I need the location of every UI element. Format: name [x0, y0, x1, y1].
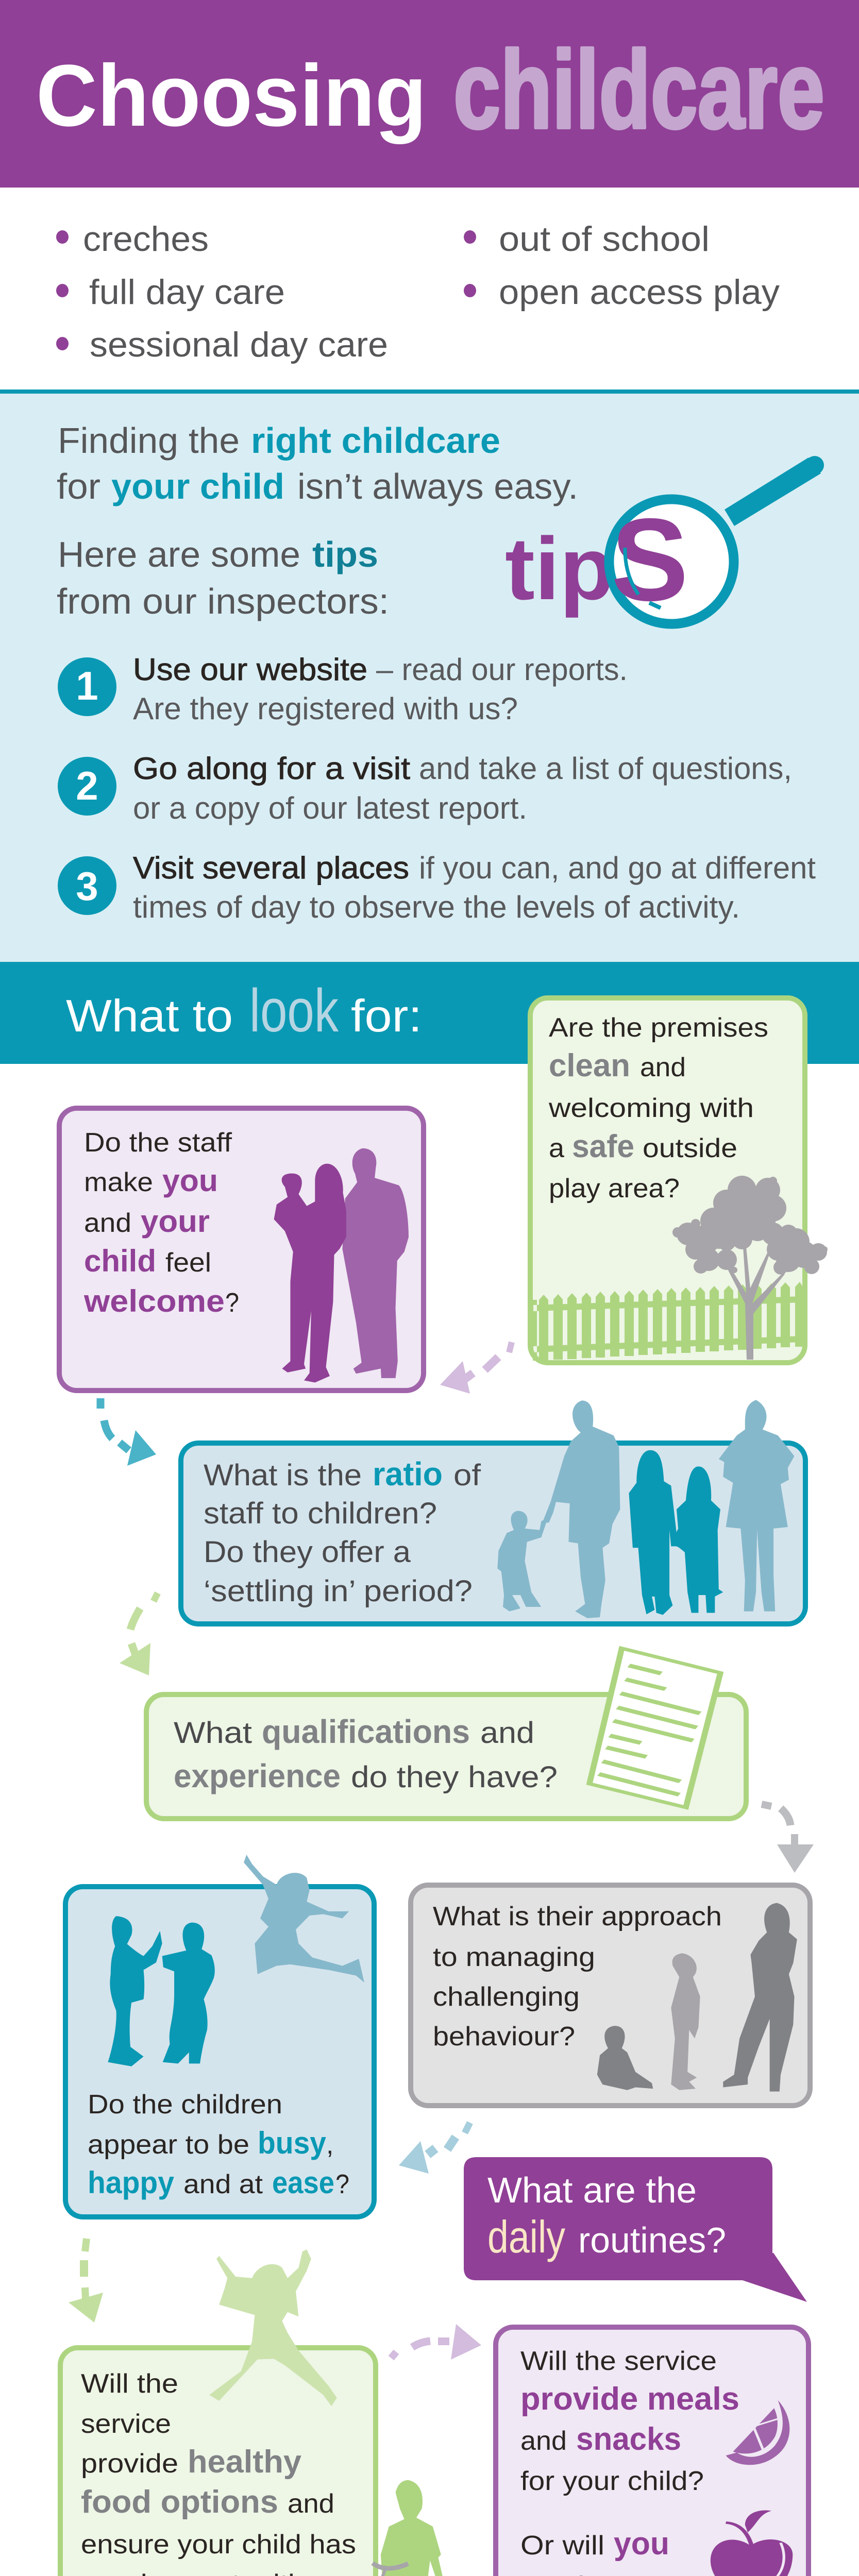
text: ratio: ratio [373, 1455, 443, 1493]
text: busy, happy, at ease [88, 2090, 349, 2200]
text: premises [548, 1013, 768, 1204]
text: behaviour: behaviour? [433, 2022, 575, 2052]
intro text: for [57, 466, 100, 506]
tip 2: and take a list of questions, [419, 751, 792, 786]
text: premises: a [549, 1133, 564, 1163]
text: welcome [83, 1128, 239, 1318]
text: premises: outside [643, 1133, 737, 1163]
tip 1: Use our website [133, 652, 367, 687]
heading band: what to look for: look [249, 977, 339, 1045]
text: meals and snacks: Or will [520, 2531, 604, 2561]
text: food options and exercise: Will the [81, 2369, 178, 2399]
text: behaviour: What is their approach [433, 1902, 722, 1931]
text: busy, happy, at ease: , [326, 2130, 333, 2160]
icon: children playing [108, 1855, 364, 2066]
list of childcare types: open access play [499, 273, 780, 312]
callout: daily routines: What are the [487, 2170, 697, 2210]
arrow: premises to welcome [440, 1342, 512, 1394]
icon: jumping girl [209, 2249, 337, 2406]
icon: apple [711, 2511, 793, 2576]
text: welcome: child [84, 1244, 156, 1278]
intro text: from our inspectors: [57, 581, 389, 621]
text: food options and exercise: service [81, 2409, 171, 2439]
text: busy, happy, at ease: and at [183, 2170, 263, 2199]
heading band: what to look for [0, 962, 859, 1064]
text: qualifications [174, 1713, 558, 1794]
list of childcare types: out of school [499, 219, 710, 259]
panel: qualifications [146, 1648, 746, 1819]
panel: behaviour [411, 1885, 810, 2106]
arrow: ratio to qualifications [120, 1593, 158, 1675]
panel: premises [530, 998, 828, 1363]
text: food options and exercise [81, 2369, 356, 2576]
tip 1: Are they registered with us? [133, 691, 518, 726]
text: welcome: feel [165, 1248, 211, 1278]
icon: tree [672, 1176, 828, 1360]
panel: ratio [181, 1400, 805, 1624]
list of childcare types: creches [83, 219, 209, 259]
icon: woman, boy and baby [597, 1903, 797, 2092]
arrow: welcome to ratio [100, 1398, 156, 1466]
text: qualifications: do they have? [351, 1760, 558, 1794]
intro text [57, 420, 578, 621]
panel: busy, happy, at ease [65, 1855, 374, 2217]
text: welcome: and [84, 1208, 131, 1238]
heading band: what to look for: for: [351, 990, 422, 1041]
intro text: isn’t always easy. [297, 466, 578, 506]
text: meals and snacks: snacks [576, 2421, 681, 2457]
tip 2: or a copy of our latest report. [133, 791, 527, 825]
text: meals and snacks: for your child? [520, 2466, 704, 2496]
callout: daily routines [464, 2157, 807, 2302]
intro text: right childcare [251, 420, 500, 461]
text: food options and exercise: and [288, 2489, 334, 2519]
text: food options and exercise: provide [81, 2449, 178, 2479]
tip 2: 2 [76, 763, 98, 808]
text: busy, happy, at ease: busy [258, 2126, 327, 2160]
text: ratio: Do they offer a [204, 1535, 411, 1569]
text: ratio [204, 1455, 481, 1608]
intro text: Finding the [58, 420, 240, 461]
tip 3: Visit several places [133, 851, 409, 885]
text: busy, happy, at ease: appear to be [88, 2130, 249, 2160]
arrow: behaviour to busy [399, 2123, 470, 2174]
text: food options and exercise: ensure your child has [81, 2530, 356, 2560]
icon: boy with bike [329, 2480, 483, 2576]
callout: daily routines: daily [487, 2211, 565, 2262]
tip 1: 1 [76, 663, 98, 708]
icon: magnifying glass with tips: S [611, 495, 688, 625]
list of childcare types: full day care [89, 273, 285, 312]
list of childcare types [56, 219, 780, 364]
text: qualifications: What [174, 1716, 252, 1750]
title banner [0, 0, 859, 188]
arrow: qualifications to behaviour [762, 1804, 814, 1873]
tip 2: Go along for a visit [133, 751, 410, 786]
text: premises: and [640, 1053, 686, 1082]
text: food options and exercise: food options [81, 2484, 278, 2520]
icon: document [589, 1648, 720, 1807]
text: behaviour: to managing [433, 1942, 595, 1972]
text: welcome: your [141, 1204, 210, 1239]
text: welcome: you [162, 1163, 218, 1198]
arrow: busy to food options [69, 2239, 103, 2323]
tip 1: – read our reports. [376, 652, 628, 687]
text: ratio: ‘settling in’ period? [204, 1574, 473, 1608]
text: premises: welcoming with [548, 1093, 754, 1123]
text: welcome: welcome [83, 1284, 225, 1318]
tip 3: if you can, and go at different [419, 851, 816, 885]
text: premises: Are the premises [549, 1013, 768, 1043]
tip 3: 3 [76, 863, 98, 909]
text: behaviour [433, 1902, 722, 2052]
tip 3 [58, 851, 816, 924]
list of childcare types: sessional day care [90, 325, 388, 364]
panel: meals and snacks [496, 2327, 809, 2576]
icon: couple with child [274, 1148, 409, 1382]
text: welcome: make [84, 1167, 153, 1197]
text: premises: play area? [549, 1174, 680, 1204]
intro text: your child [111, 466, 284, 506]
text: food options and exercise: healthy [188, 2444, 302, 2480]
icon: citrus slice [726, 2400, 789, 2465]
text: premises: clean [549, 1048, 630, 1083]
text: ratio: of [453, 1459, 481, 1492]
text: behaviour: challenging [433, 1982, 580, 2012]
text: welcome: Do the staff [84, 1128, 232, 1158]
text: ratio: What is the [204, 1459, 362, 1492]
picket fence [533, 1282, 803, 1361]
panel: welcome [59, 1108, 424, 1391]
callout: daily routines: routines? [578, 2220, 726, 2260]
tip 2 [58, 751, 792, 825]
text: meals and snacks: and [520, 2426, 567, 2456]
text: ratio: staff to children? [204, 1497, 437, 1530]
intro text: tips [312, 534, 378, 574]
text: busy, happy, at ease: Do the children [88, 2090, 282, 2120]
arrow: food options to meals [391, 2324, 481, 2360]
text: meals and snacks: you [614, 2526, 669, 2562]
text: busy, happy, at ease: ease [272, 2165, 334, 2200]
text: busy, happy, at ease: ? [335, 2170, 349, 2199]
text: busy, happy, at ease: happy [88, 2165, 175, 2200]
title text: Choosing: Choosing [36, 47, 427, 145]
icon: magnifying glass with tips: tip [505, 519, 614, 618]
text: qualifications: and [480, 1716, 534, 1750]
heading band: what to look for: What to [66, 990, 233, 1041]
text: meals and snacks [520, 2346, 739, 2576]
tip 3: times of day to observe the levels of activity. [133, 890, 740, 924]
text: meals and snacks: provide meals [520, 2381, 739, 2417]
text: qualifications: experience [174, 1757, 341, 1794]
tip 1 [58, 652, 628, 726]
icon: family group [497, 1400, 794, 1618]
panel: food options and exercise [60, 2249, 483, 2576]
text: welcome: ? [225, 1288, 239, 1318]
icon: magnifying glass with tips [505, 456, 824, 625]
text: meals and snacks: Will the service [520, 2346, 717, 2376]
panel: tips [0, 389, 859, 962]
text: qualifications: qualifications [262, 1713, 470, 1750]
text: premises: safe [572, 1129, 634, 1164]
intro text: Here are some [58, 534, 300, 574]
